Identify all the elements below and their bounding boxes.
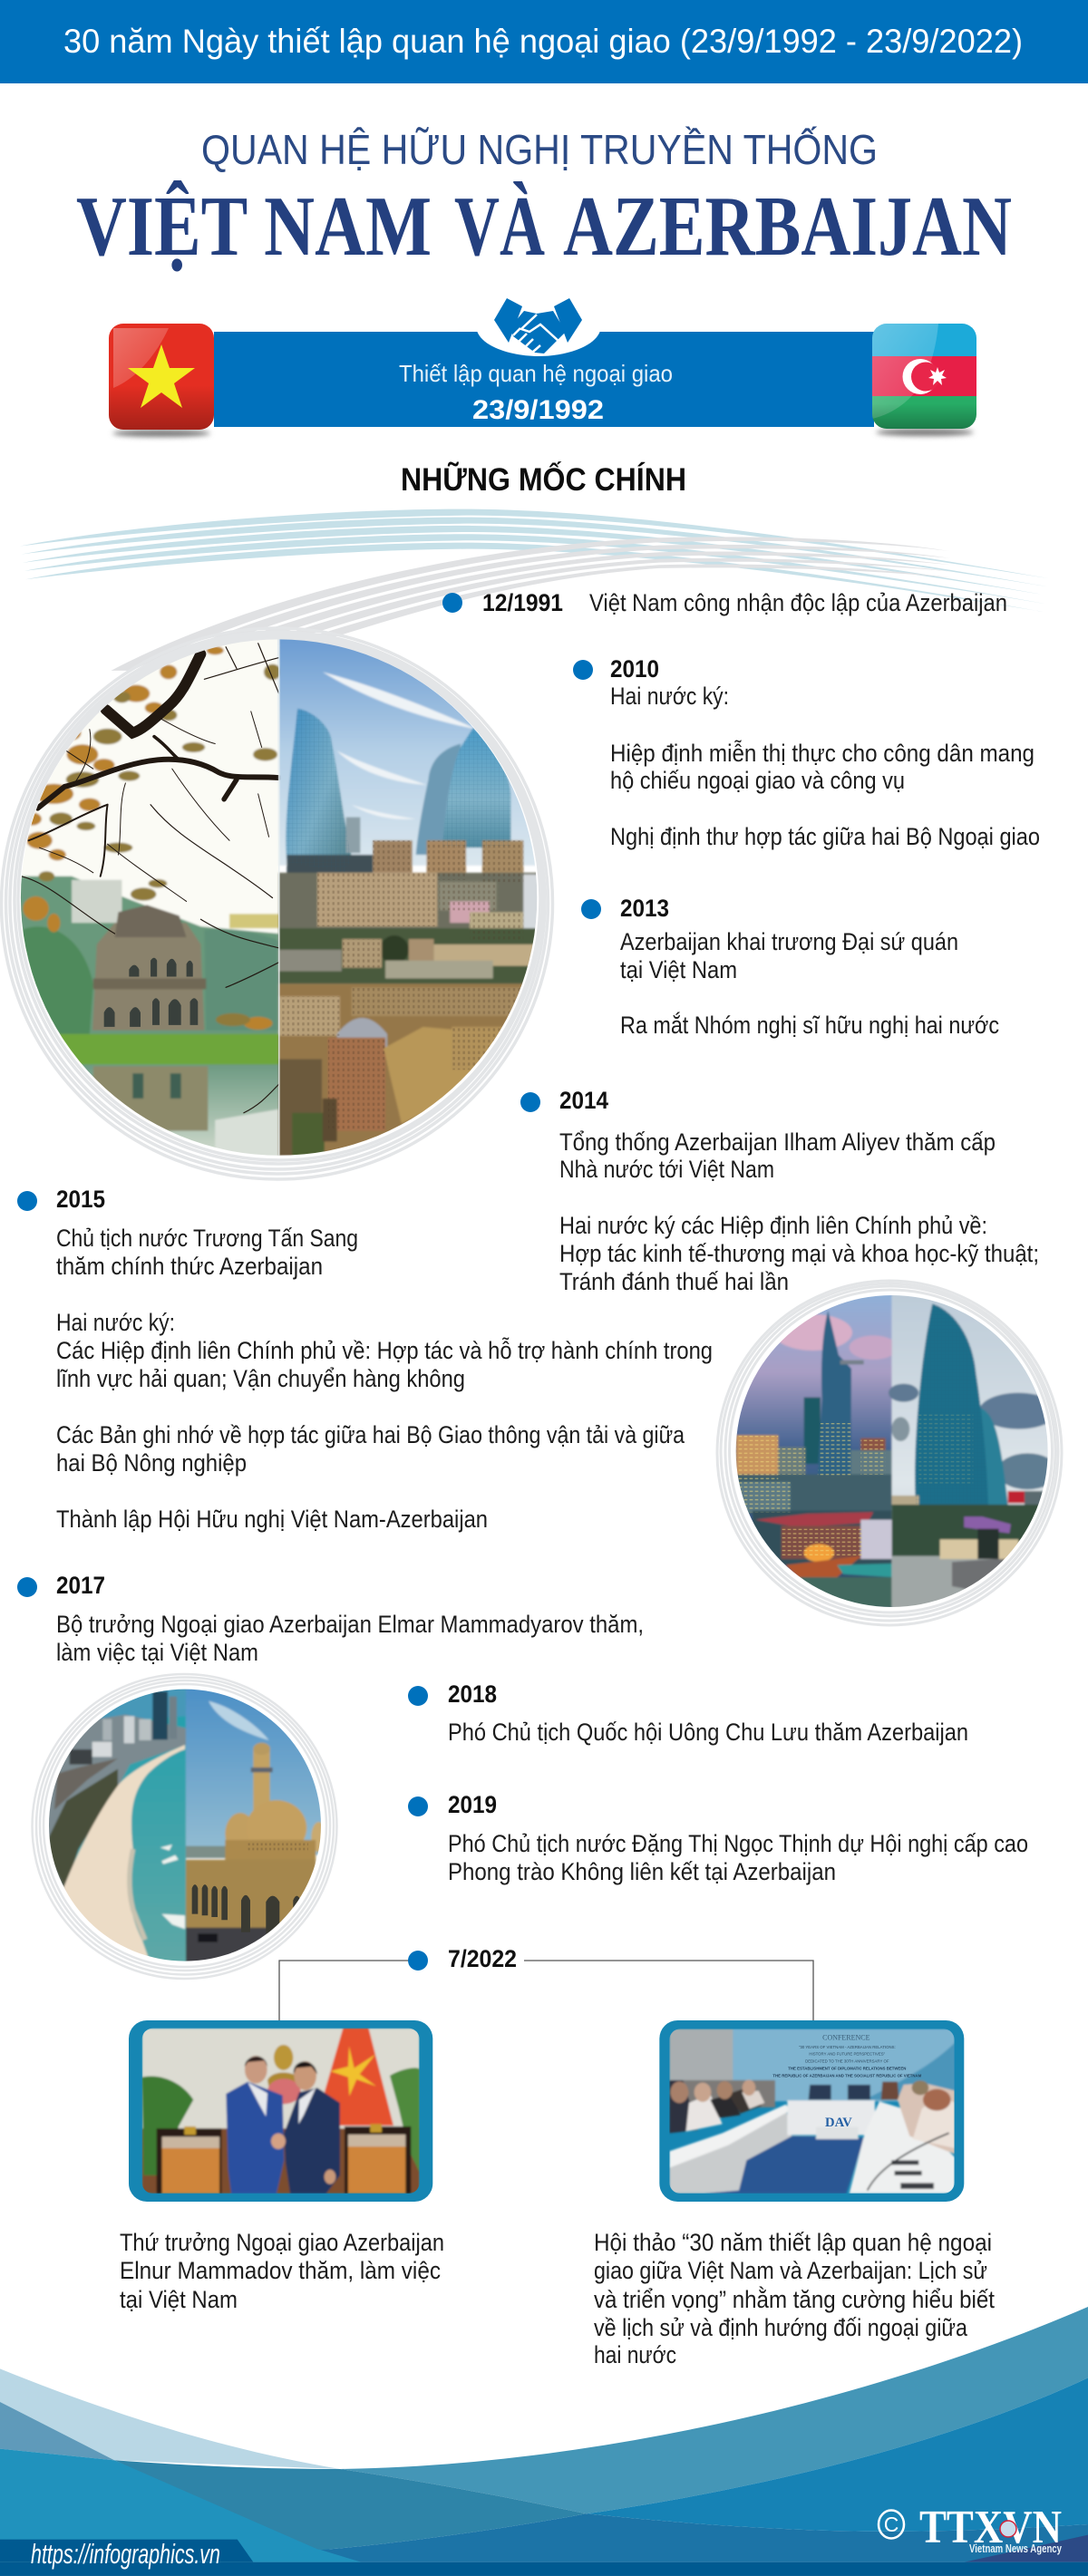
- caption: conference: và triển vọng” nhằm tăng cường hiểu biết: [594, 2285, 995, 2313]
- milestone 2015: 2015: [56, 1186, 105, 1213]
- milestone 2018: 2018: [448, 1680, 497, 1708]
- milestone 12/1991: 12/1991: [482, 589, 563, 616]
- milestone 2017: 2017: [56, 1572, 105, 1599]
- header bar: 30 năm Ngày thiết lập quan hệ ngoại giao (23/9/1992 - 23/9/2022): [63, 23, 1023, 60]
- milestone 2019: 2019: [448, 1791, 497, 1818]
- milestone 2017: [17, 1572, 644, 1666]
- milestone 2010: [573, 655, 1040, 850]
- footer waves: [0, 2307, 1088, 2576]
- milestone 12/1991: [442, 589, 1007, 616]
- photo frame: conference: CONFERENCE: [822, 2034, 870, 2042]
- decorative swoosh arcs: [19, 509, 1049, 671]
- milestone 2015: Các Hiệp định liên Chính phủ về: Hợp tác và hỗ trợ hành chính trong: [56, 1336, 713, 1364]
- milestone 2013: Azerbaijan khai trương Đại sứ quán: [620, 928, 958, 955]
- caption: deputy foreign minister visit: [120, 2229, 444, 2313]
- icon: handshake: [494, 298, 582, 353]
- photo circle: Ho Chi Minh City and Baku: [717, 1281, 1062, 1625]
- milestone 7/2022 with connector: 7/2022: [448, 1945, 517, 1972]
- milestone 2013: [581, 895, 999, 1039]
- title: VÀ: [454, 179, 545, 274]
- milestone 2013: tại Việt Nam: [620, 956, 737, 983]
- photo frame: conference: THE REPUBLIC OF AZERBAIJAN AND THE SOCIALIST REPUBLIC OF VIETNAM: [772, 2074, 922, 2078]
- title: [76, 126, 1012, 274]
- header bar: [0, 0, 1088, 83]
- milestone 2010: Hiệp định miễn thị thực cho công dân mang: [610, 739, 1035, 767]
- logo: TTXVN: C: [884, 2513, 899, 2536]
- milestone 2010: hộ chiếu ngoại giao và công vụ: [610, 767, 905, 794]
- caption: conference: về lịch sử và định hướng đối ngoại giữa: [594, 2314, 968, 2341]
- milestone 2014: Hai nước ký các Hiệp định liên Chính phủ về:: [559, 1212, 987, 1239]
- milestone 2017: làm việc tại Việt Nam: [56, 1639, 258, 1666]
- milestone 2018: [408, 1680, 968, 1746]
- milestone 2010: Hai nước ký:: [610, 683, 729, 710]
- heading: milestones: NHỮNG MỐC CHÍNH: [401, 461, 686, 498]
- caption: deputy foreign minister visit: tại Việt Nam: [120, 2286, 238, 2313]
- photo frame: conference: [659, 2020, 964, 2202]
- caption: conference: hai nước: [594, 2341, 676, 2368]
- photo circle: Da Nang beach and Baku mosque: [33, 1674, 337, 1979]
- milestone 2015: Thành lập Hội Hữu nghị Việt Nam-Azerbaijan: [56, 1506, 488, 1533]
- milestone 2019: [408, 1791, 1028, 1885]
- website url: https://infographics.vn: [31, 2538, 220, 2570]
- title: VIỆT NAM: [76, 179, 432, 274]
- caption: conference: giao giữa Việt Nam và Azerbaijan: Lịch sử: [594, 2257, 987, 2284]
- milestone 2015: Chủ tịch nước Trương Tấn Sang: [56, 1225, 358, 1252]
- milestone 2014: Nhà nước tới Việt Nam: [559, 1156, 774, 1183]
- milestone 2019: Phong trào Không liên kết tại Azerbaijan: [448, 1858, 836, 1885]
- milestone 2015: hai Bộ Nông nghiệp: [56, 1449, 247, 1477]
- milestone 2017: Bộ trưởng Ngoại giao Azerbaijan Elmar Mammadyarov thăm,: [56, 1611, 644, 1638]
- milestone 2015: thăm chính thức Azerbaijan: [56, 1253, 323, 1280]
- caption: conference: [594, 2229, 995, 2368]
- logo: TTXVN: TTXVN: [919, 2502, 1062, 2553]
- title: QUAN HỆ HỮU NGHỊ TRUYỀN THỐNG: [201, 126, 878, 173]
- photo circle: Hanoi and Baku: [2, 628, 553, 1179]
- photo frame: conference: HISTORY AND FUTURE PERSPECTIVES": [809, 2051, 886, 2056]
- milestone 2015: Hai nước ký:: [56, 1309, 175, 1336]
- photo frame: conference: DAV: [825, 2116, 852, 2130]
- milestone 2014: [520, 1087, 1039, 1295]
- photo frame: conference: DEDICATED TO THE 30TH ANNIVERSARY OF: [805, 2058, 889, 2063]
- banner: established date: Thiết lập quan hệ ngoại giao: [399, 360, 673, 387]
- banner: established date: 23/9/1992: [472, 395, 604, 425]
- milestone 12/1991: Việt Nam công nhận độc lập của Azerbaijan: [589, 589, 1007, 616]
- logo: TTXVN: [879, 2502, 1063, 2555]
- photo frame: conference: "30 YEARS OF VIETNAM - AZERBAIJAN RELATIONS:: [799, 2045, 896, 2049]
- banner: established date: [214, 331, 874, 427]
- icon: Azerbaijan flag: [872, 324, 976, 436]
- photo frame: deputy minister meeting: [129, 2020, 432, 2202]
- caption: deputy foreign minister visit: Thứ trưởng Ngoại giao Azerbaijan: [120, 2229, 444, 2256]
- milestone 2014: Hợp tác kinh tế-thương mại và khoa học-kỹ thuật;: [559, 1240, 1039, 1267]
- caption: conference: Hội thảo “30 năm thiết lập quan hệ ngoại: [594, 2229, 992, 2256]
- milestone 2013: Ra mắt Nhóm nghị sĩ hữu nghị hai nước: [620, 1011, 999, 1039]
- icon: Vietnam flag: [109, 324, 214, 437]
- milestone 2013: 2013: [620, 895, 669, 922]
- milestone 2015: [17, 1186, 713, 1533]
- milestone 2014: Tổng thống Azerbaijan Ilham Aliyev thăm cấp: [559, 1128, 996, 1156]
- milestone 7/2022 with connector: [279, 1945, 813, 2020]
- milestone 2018: Phó Chủ tịch Quốc hội Uông Chu Lưu thăm Azerbaijan: [448, 1719, 968, 1746]
- milestone 2015: Các Bản ghi nhớ về hợp tác giữa hai Bộ Giao thông vận tải và giữa: [56, 1421, 685, 1448]
- milestone 2010: 2010: [610, 655, 659, 683]
- milestone 2010: Nghị định thư hợp tác giữa hai Bộ Ngoại giao: [610, 823, 1040, 850]
- milestone 2015: lĩnh vực hải quan; Vận chuyển hàng không: [56, 1365, 465, 1392]
- photo frame: conference: THE ESTABLISHMENT OF DIPLOMATIC RELATIONS BETWEEN: [788, 2066, 906, 2070]
- milestone 2014: 2014: [559, 1087, 608, 1114]
- caption: deputy foreign minister visit: Elnur Mammadov thăm, làm việc: [120, 2257, 441, 2284]
- milestone 2014: Tránh đánh thuế hai lần: [559, 1268, 789, 1295]
